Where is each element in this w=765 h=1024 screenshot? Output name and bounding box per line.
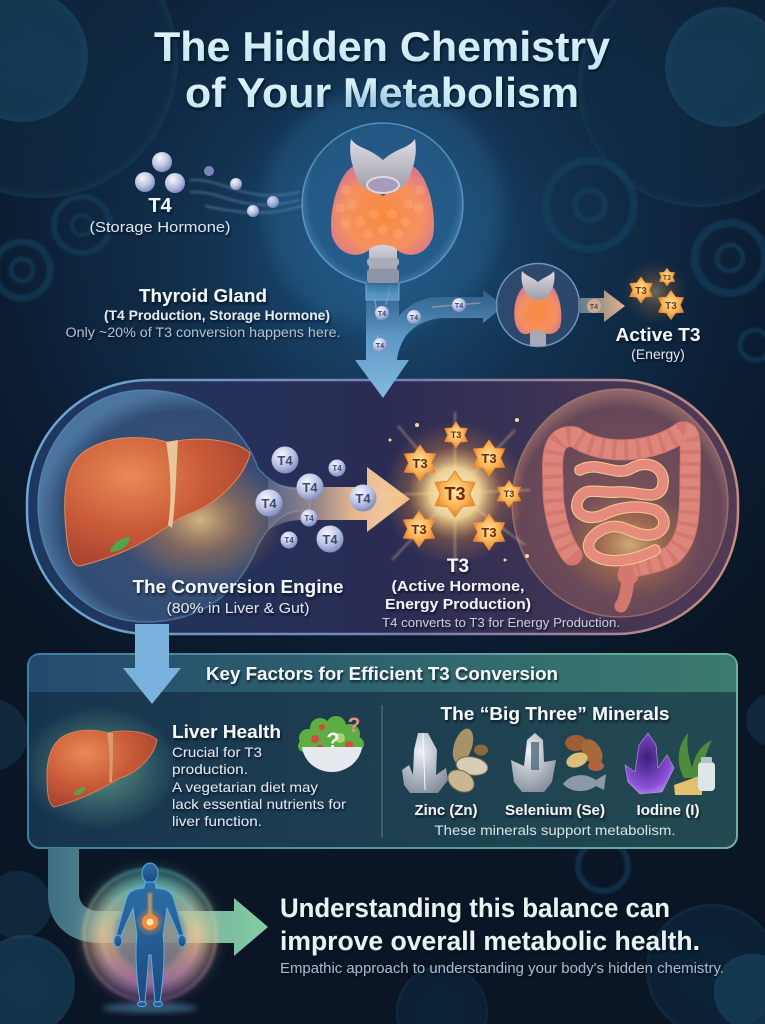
T3 stars: T3	[481, 451, 497, 466]
icon: salad bowl with question mark: ?	[326, 728, 340, 753]
liver health text: A vegetarian diet may	[172, 779, 318, 795]
Active T3 label	[616, 325, 700, 362]
Thyroid gland label: (T4 Production, Storage Hormone)	[104, 307, 330, 323]
liver health text: lack essential nutrients for	[172, 796, 346, 812]
T4 spheres: T4	[322, 532, 338, 547]
T3 stars	[403, 422, 521, 550]
thyroid gland lobes	[331, 167, 434, 255]
divider	[381, 705, 383, 838]
Thyroid gland label: Only ~20% of T3 conversion happens here.	[66, 325, 340, 340]
conversion engine label: (80% in Liver & Gut)	[166, 601, 310, 617]
title: of Your Metabolism	[185, 69, 579, 116]
iodine icon	[625, 733, 715, 795]
panel: conversion engine	[27, 380, 738, 634]
liver health text: liver function.	[172, 813, 262, 829]
T3 burst	[380, 412, 530, 572]
body	[114, 863, 186, 1006]
T3 stars: T3	[451, 430, 461, 440]
closing message: Empathic approach to understanding your body's hidden chemistry.	[280, 961, 724, 977]
down arrow from thyroid and branch arrow: T4	[378, 311, 386, 318]
liver	[65, 438, 250, 566]
Active T3 label: Active T3	[616, 325, 700, 345]
down arrow from thyroid and branch arrow	[355, 285, 504, 398]
closing message: improve overall metabolic health.	[280, 926, 700, 956]
icon: salad bowl with question mark: ?	[348, 714, 360, 737]
T4 storage hormone group	[90, 152, 305, 236]
liver health text: Crucial for T3	[172, 744, 262, 760]
T3 stars: T3	[411, 522, 427, 537]
T4 label: (Storage Hormone)	[90, 220, 230, 236]
closing message	[280, 893, 724, 977]
mineral labels: Selenium (Se)	[505, 802, 605, 819]
small liver	[22, 706, 178, 830]
title: The Hidden Chemistry	[154, 23, 611, 70]
T3 active label: T4 converts to T3 for Energy Production.	[382, 615, 620, 630]
down arrow from thyroid and branch arrow: T4	[410, 315, 418, 322]
T4 spheres: T4	[332, 464, 342, 473]
T4 spheres: T4	[355, 491, 371, 506]
T4 spheres: T4	[302, 480, 318, 495]
T3 stars: T3	[412, 456, 428, 471]
T3 stars: T3	[481, 525, 497, 540]
T4 label	[90, 195, 230, 236]
T4 spheres: T4	[304, 514, 314, 523]
selenium icon	[511, 733, 607, 792]
closing message: Understanding this balance can	[280, 893, 670, 923]
T4 spheres: T4	[261, 496, 277, 511]
mineral labels	[414, 802, 700, 819]
small thyroid bubble	[496, 264, 580, 346]
T3 active label: (Active Hormone,	[392, 578, 524, 595]
core glow	[135, 893, 165, 937]
T3 active label: T3	[447, 556, 469, 577]
conversion arrow	[268, 467, 410, 532]
Thyroid gland label	[66, 286, 340, 340]
down arrow from thyroid and branch arrow: T4	[455, 303, 463, 310]
bottom arrow	[48, 848, 268, 956]
conversion engine label: The Conversion Engine	[132, 576, 344, 597]
big three heading: The “Big Three” Minerals	[440, 704, 670, 724]
active T3 stars	[623, 260, 687, 324]
liver health text: production.	[172, 761, 248, 777]
mineral labels: Zinc (Zn)	[414, 802, 478, 819]
intestine	[553, 432, 700, 606]
key factors heading: Key Factors for Efficient T3 Conversion	[206, 664, 558, 684]
liver bubble	[38, 390, 310, 622]
active T3 stars: T3	[665, 301, 677, 312]
down arrow from thyroid and branch arrow: T4	[376, 343, 384, 350]
cartilage	[350, 139, 416, 192]
T3 active label	[382, 556, 620, 630]
conversion engine label	[132, 576, 344, 617]
arrow to active T3	[578, 290, 625, 322]
minerals caption: These minerals support metabolism.	[434, 822, 676, 838]
active T3 stars: T3	[635, 286, 647, 297]
panel: key factors	[22, 654, 737, 848]
Thyroid gland label: Thyroid Gland	[139, 286, 267, 306]
T3 stars: T3	[444, 484, 466, 504]
active T3 stars: T3	[663, 275, 671, 282]
arrow from panel to key factors	[123, 624, 181, 704]
T4 spheres: T4	[277, 453, 293, 468]
Active T3 label: (Energy)	[631, 346, 685, 362]
liver health text: Liver Health	[172, 721, 281, 742]
T4 label: T4	[148, 195, 173, 217]
T3 active label: Energy Production)	[385, 596, 531, 613]
glow behind thyroid	[263, 90, 503, 330]
human figure with aura	[84, 863, 216, 1013]
zinc icon	[402, 726, 489, 797]
gut bubble	[512, 389, 728, 617]
title	[154, 23, 611, 116]
glow under liver	[115, 455, 285, 585]
trachea	[367, 240, 399, 283]
thyroid bubble	[302, 123, 463, 300]
header band	[29, 655, 736, 692]
T4 spheres	[256, 446, 376, 552]
T3 stars: T3	[504, 489, 514, 499]
mineral labels: Iodine (I)	[636, 802, 700, 819]
icon: salad bowl with question mark	[298, 714, 364, 772]
T4 spheres: T4	[284, 536, 294, 545]
liver health text	[172, 721, 346, 829]
arrow to active T3: T4	[590, 304, 598, 311]
